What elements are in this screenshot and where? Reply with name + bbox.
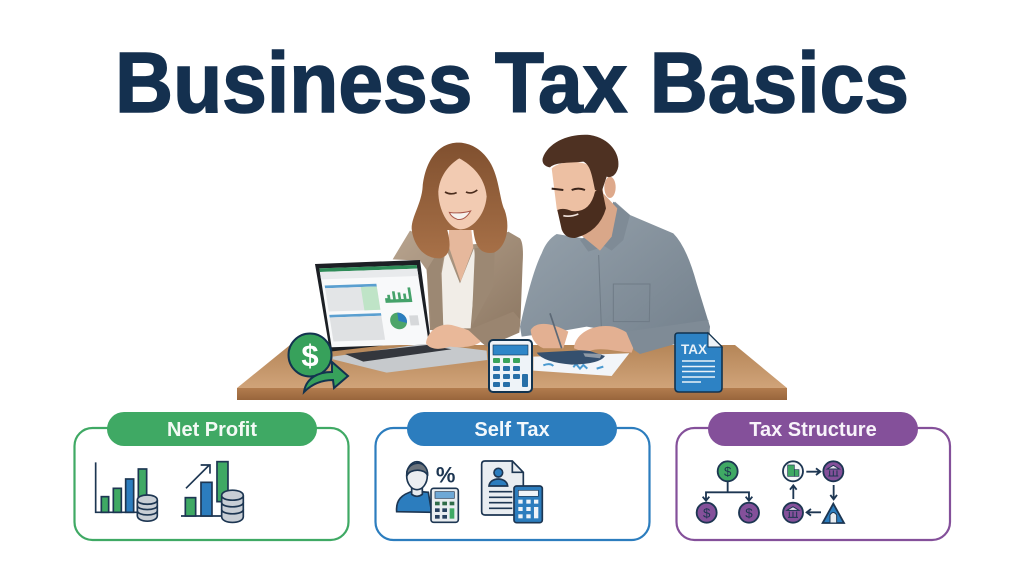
- panel: self tax: [376, 412, 650, 540]
- icon: tax document: TAX: [681, 342, 707, 357]
- illustration: woman: [393, 143, 523, 347]
- icon: person with percent and calculator: %: [436, 462, 455, 487]
- icon: tax document: [675, 333, 722, 392]
- woman blouse: [442, 248, 476, 328]
- illustration: laptop: [315, 260, 521, 373]
- woman smile: [449, 211, 471, 219]
- icon: dollar split diagram: $: [724, 464, 732, 479]
- man hand with pen: [531, 324, 568, 348]
- man collar: [580, 202, 630, 252]
- woman hair: [412, 143, 507, 258]
- icon: dollar coin with arrow: $: [301, 338, 319, 373]
- woman lapels: [427, 245, 495, 328]
- man neck: [575, 193, 617, 251]
- panel heading: Net Profit: [167, 419, 257, 441]
- panel border: [676, 428, 950, 540]
- panel: tax structure: [676, 412, 950, 540]
- man face: [552, 162, 604, 237]
- man beard: [557, 187, 606, 238]
- paper report: [533, 353, 629, 376]
- woman face: [438, 158, 487, 229]
- laptop screen frame: [315, 260, 431, 352]
- panel heading: [708, 412, 918, 446]
- icon: entity flow cycle: [783, 461, 844, 523]
- woman neck: [448, 223, 473, 282]
- icon: document with calculator: [482, 461, 542, 523]
- man hair: [542, 135, 619, 192]
- icon: large calculator: [489, 340, 532, 392]
- panel heading: [107, 412, 317, 446]
- man placket and pocket: [599, 255, 650, 327]
- icon: rising chart with coins: [181, 462, 243, 522]
- man eyes: [552, 189, 585, 190]
- icon: dollar split diagram: [697, 461, 759, 523]
- icon: dollar split diagram: $: [745, 505, 753, 520]
- icon: dollar coin with arrow: [288, 334, 348, 392]
- icon: person with percent and calculator: [397, 462, 458, 522]
- man sleeve: [626, 320, 710, 354]
- panel: net profit: [74, 412, 348, 540]
- panel heading: Tax Structure: [749, 419, 877, 441]
- desk calculator: [537, 350, 605, 365]
- illustration: man: [520, 135, 710, 376]
- illustration: desk: [237, 345, 787, 400]
- laptop screen content: [319, 265, 429, 347]
- icon: dollar split diagram: $: [703, 505, 711, 520]
- icon: bar chart with coins: [96, 462, 157, 521]
- man shirt: [520, 202, 710, 353]
- panel heading: Self Tax: [474, 419, 550, 441]
- man smile: [563, 214, 578, 216]
- woman hand: [426, 325, 483, 349]
- panel border: [74, 428, 348, 540]
- woman blazer: [393, 231, 523, 347]
- panel heading: [407, 412, 617, 446]
- man ear: [604, 177, 616, 198]
- panel border: [376, 428, 650, 540]
- woman sleeve: [468, 312, 521, 347]
- man hand on calculator: [574, 326, 635, 353]
- woman eyes: [445, 190, 477, 194]
- title: Business Tax Basics: [115, 36, 909, 131]
- laptop base: [333, 343, 487, 373]
